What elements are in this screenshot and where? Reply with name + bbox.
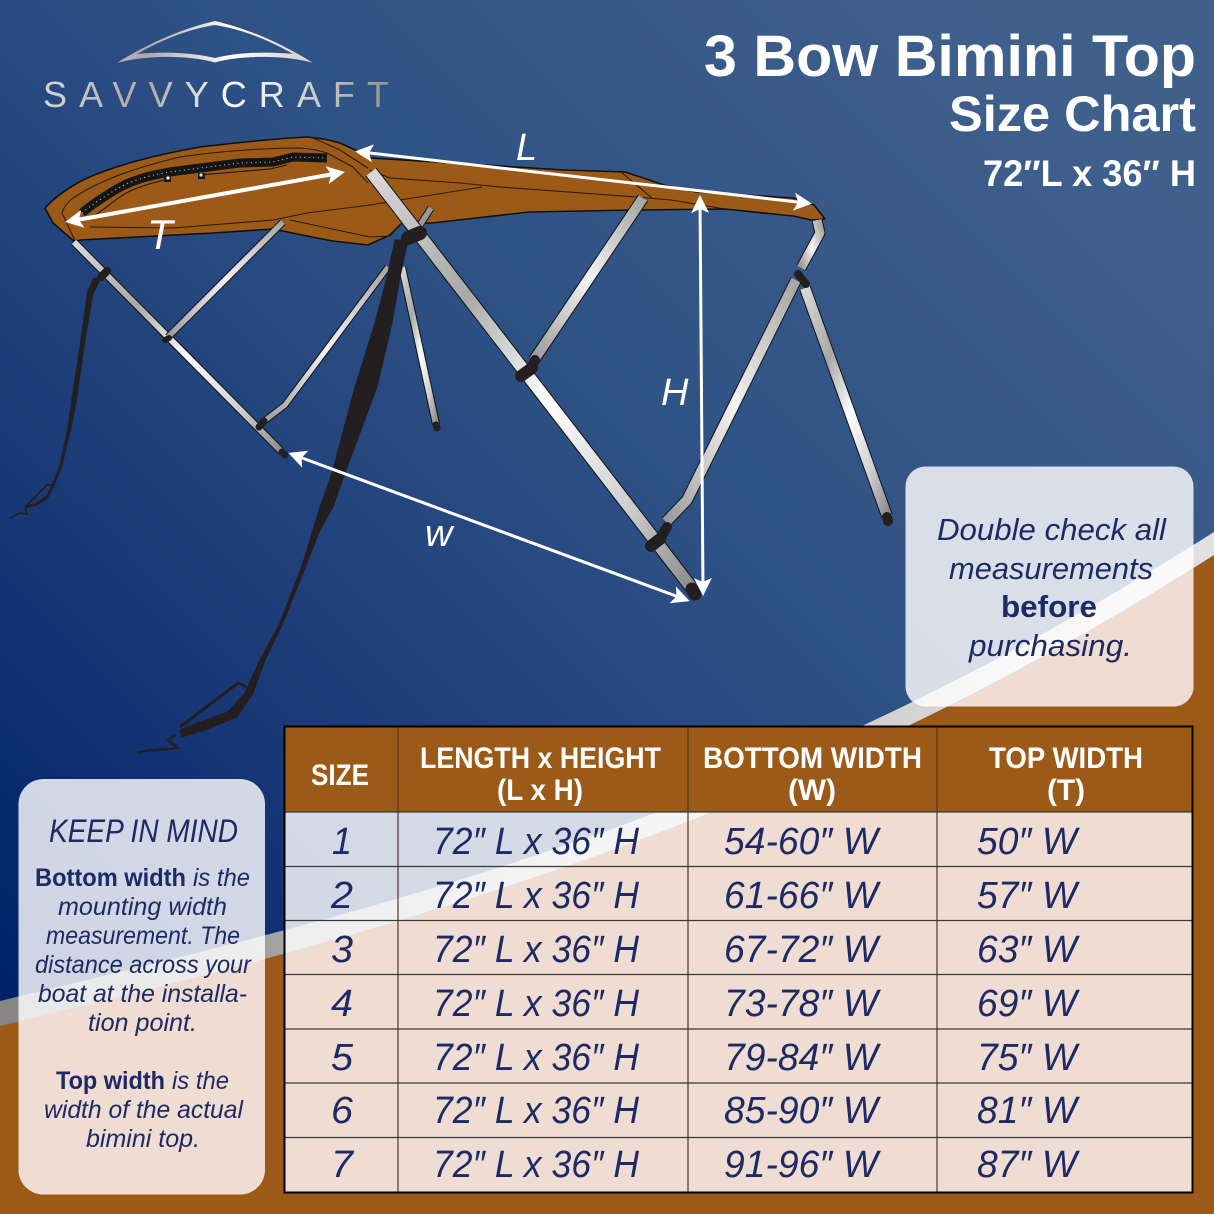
row 3: 3 — [331, 929, 353, 971]
row 2: 2 — [330, 875, 353, 917]
table header: (L x H) — [497, 774, 583, 807]
black straps — [10, 240, 408, 753]
row 2 — [330, 875, 1080, 917]
row 5 — [331, 1037, 1080, 1079]
panel: keep in mind — [18, 779, 265, 1194]
tube: rear bow — [74, 208, 436, 451]
title: 72″L x 36″ H — [983, 153, 1196, 194]
row 4: 69″ W — [977, 983, 1080, 1025]
row 1: 50″ W — [977, 821, 1080, 863]
row 6: 81″ W — [977, 1090, 1080, 1132]
frame tubes — [74, 172, 888, 594]
panel: keep in mind: distance across your — [35, 951, 253, 979]
callout: double check: measurements — [949, 551, 1153, 586]
row 5: 5 — [331, 1037, 354, 1079]
clamps and end caps — [101, 233, 888, 594]
table header: BOTTOM WIDTH — [703, 742, 922, 775]
panel: keep in mind: is the — [193, 864, 250, 892]
callout: double check — [906, 466, 1194, 706]
row 7: 87″ W — [977, 1144, 1080, 1186]
row 5: 75″ W — [977, 1037, 1080, 1079]
row 7 — [331, 1144, 1080, 1186]
callout: double check: before — [1001, 589, 1097, 624]
table header: (T) — [1047, 774, 1085, 807]
table header: SIZE — [311, 759, 369, 792]
arrow W: w — [425, 513, 455, 555]
logo: SAVVYCRAFT — [43, 74, 389, 115]
arrow H: H — [661, 372, 689, 414]
row 6: 6 — [331, 1090, 354, 1132]
panel: keep in mind: KEEP IN MIND — [49, 813, 238, 849]
row 5: 72″ L x 36″ H — [433, 1037, 640, 1079]
row 3 — [331, 929, 1080, 971]
row 7: 91-96″ W — [724, 1144, 881, 1186]
row 6: 72″ L x 36″ H — [433, 1090, 640, 1132]
callout: double check: Double check all — [937, 512, 1167, 547]
row 3: 72″ L x 36″ H — [433, 929, 640, 971]
row 1 — [332, 821, 1080, 863]
panel: keep in mind: mounting width — [58, 893, 227, 921]
title: 3 Bow Bimini Top — [704, 24, 1196, 89]
panel: keep in mind: measurement. The — [46, 922, 240, 950]
arrow T — [71, 173, 339, 258]
row 3: 63″ W — [977, 929, 1080, 971]
panel: keep in mind: Bottom width — [35, 864, 186, 892]
canopy — [45, 137, 825, 245]
table header: LENGTH x HEIGHT — [420, 742, 661, 775]
tube: middle bow — [371, 172, 691, 587]
row 1: 72″ L x 36″ H — [433, 821, 640, 863]
panel: keep in mind: Top width — [56, 1067, 165, 1095]
row 1: 1 — [332, 821, 352, 863]
arrow W — [294, 455, 684, 599]
row 4: 4 — [331, 983, 353, 1025]
row 4: 72″ L x 36″ H — [433, 983, 640, 1025]
row 2: 72″ L x 36″ H — [433, 875, 640, 917]
table header: TOP WIDTH — [989, 742, 1143, 775]
table body background — [285, 812, 1192, 1192]
logo mark — [117, 21, 313, 63]
panel: keep in mind: bimini top. — [86, 1125, 200, 1153]
table header: (W) — [788, 774, 836, 807]
panel: keep in mind: boat at the installa- — [38, 980, 247, 1008]
callout: double check: purchasing. — [968, 628, 1132, 663]
size table — [284, 726, 1193, 1193]
zipper — [82, 157, 327, 217]
row 7: 72″ L x 36″ H — [433, 1144, 640, 1186]
panel: keep in mind: is the — [172, 1067, 229, 1095]
arrow L: L — [516, 127, 537, 169]
row 6: 85-90″ W — [724, 1090, 881, 1132]
panel: keep in mind: width of the actual — [44, 1096, 244, 1124]
row 3: 67-72″ W — [724, 929, 881, 971]
arrow H — [661, 201, 703, 590]
row 2: 61-66″ W — [724, 875, 881, 917]
row 2: 57″ W — [977, 875, 1080, 917]
arrow T: T — [147, 211, 176, 258]
title — [704, 24, 1196, 194]
bimini top diagram — [10, 137, 888, 753]
table grid — [284, 726, 1193, 1193]
row 7: 7 — [331, 1144, 355, 1186]
tube: front bow — [666, 220, 887, 522]
panel: keep in mind: tion point. — [88, 1009, 197, 1037]
row 6 — [331, 1090, 1080, 1132]
table header — [284, 726, 1193, 812]
logo — [43, 21, 389, 115]
arrow L — [361, 127, 806, 203]
title: Size Chart — [949, 86, 1196, 142]
row 4: 73-78″ W — [724, 983, 881, 1025]
row 5: 79-84″ W — [724, 1037, 881, 1079]
row 1: 54-60″ W — [724, 821, 881, 863]
row 4 — [331, 983, 1080, 1025]
measurement arrows — [71, 127, 806, 599]
